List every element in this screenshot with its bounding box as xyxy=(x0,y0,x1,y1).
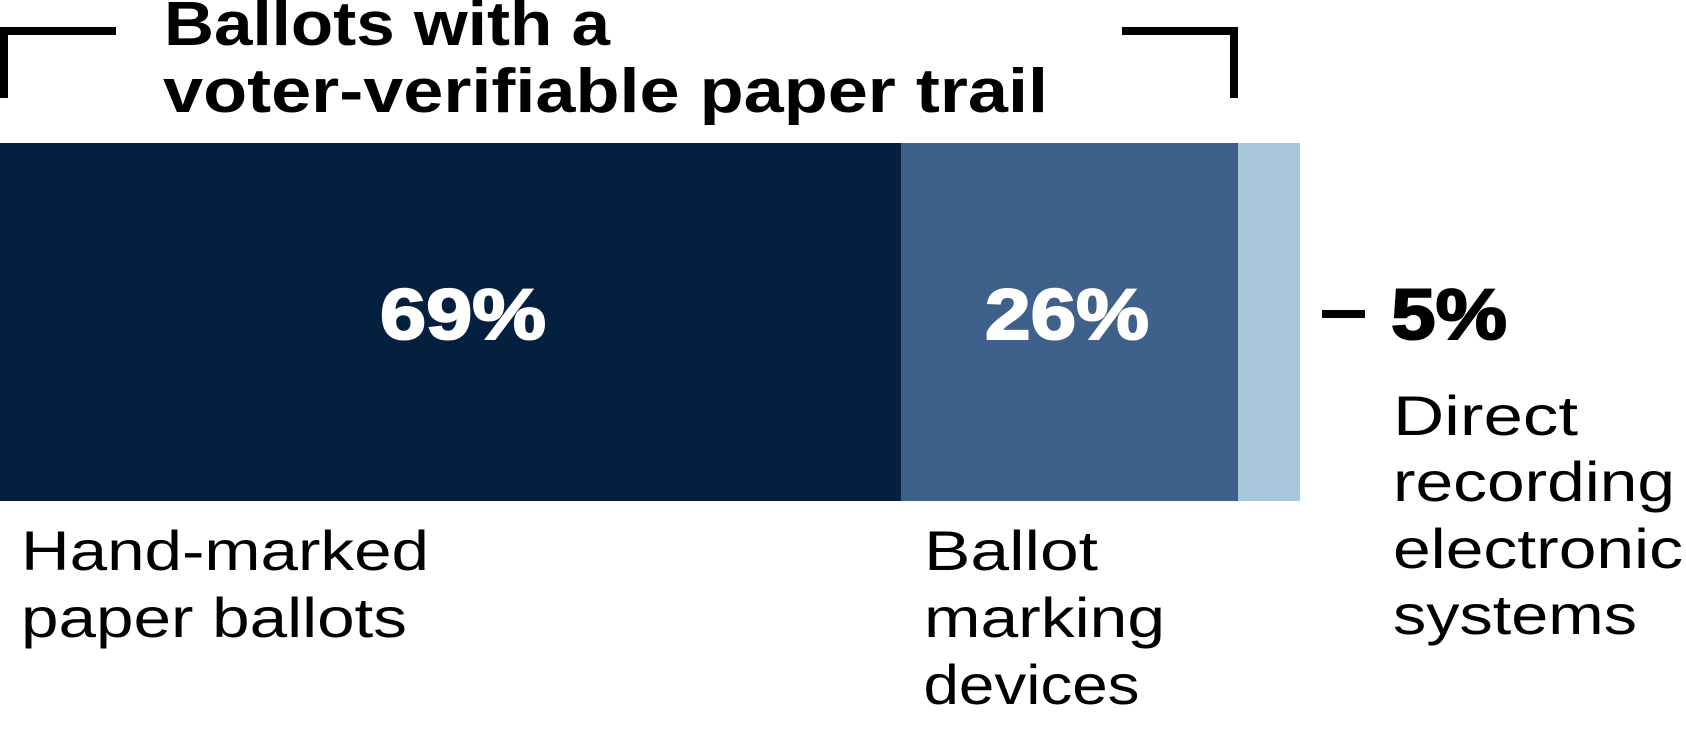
label: hand-marked paper ballots: paper ballots xyxy=(21,586,407,649)
segment: hand-marked paper ballots 69% xyxy=(0,143,901,501)
leader dash to 5% xyxy=(1322,310,1365,318)
stacked bar chart xyxy=(0,143,1300,501)
label: ballot marking devices: Ballot xyxy=(924,519,1099,582)
label: direct recording electronic systems xyxy=(1393,384,1683,646)
label: ballot marking devices xyxy=(924,519,1165,716)
segment: ballot marking devices 26% xyxy=(901,143,1238,501)
bracket: right corner xyxy=(1122,27,1238,98)
value: 69%: 69% xyxy=(380,276,546,355)
title: voter-verifiable paper trail xyxy=(163,57,1048,126)
label: hand-marked paper ballots: Hand-marked xyxy=(21,519,429,582)
label: direct recording electronic systems: Direct xyxy=(1393,384,1579,447)
label: ballot marking devices: marking xyxy=(924,586,1165,649)
label: direct recording electronic systems: recording xyxy=(1393,450,1675,513)
value: 26%: 26% xyxy=(985,276,1149,355)
segment: direct recording electronic systems 5% xyxy=(1238,143,1300,501)
label: direct recording electronic systems: systems xyxy=(1393,583,1637,646)
value: 5%: 5% xyxy=(1391,276,1507,355)
label: ballot marking devices: devices xyxy=(924,653,1140,716)
label: direct recording electronic systems: electronic xyxy=(1393,517,1683,580)
label: hand-marked paper ballots xyxy=(21,519,429,649)
bracket: left corner xyxy=(0,27,116,98)
title xyxy=(163,0,1048,126)
